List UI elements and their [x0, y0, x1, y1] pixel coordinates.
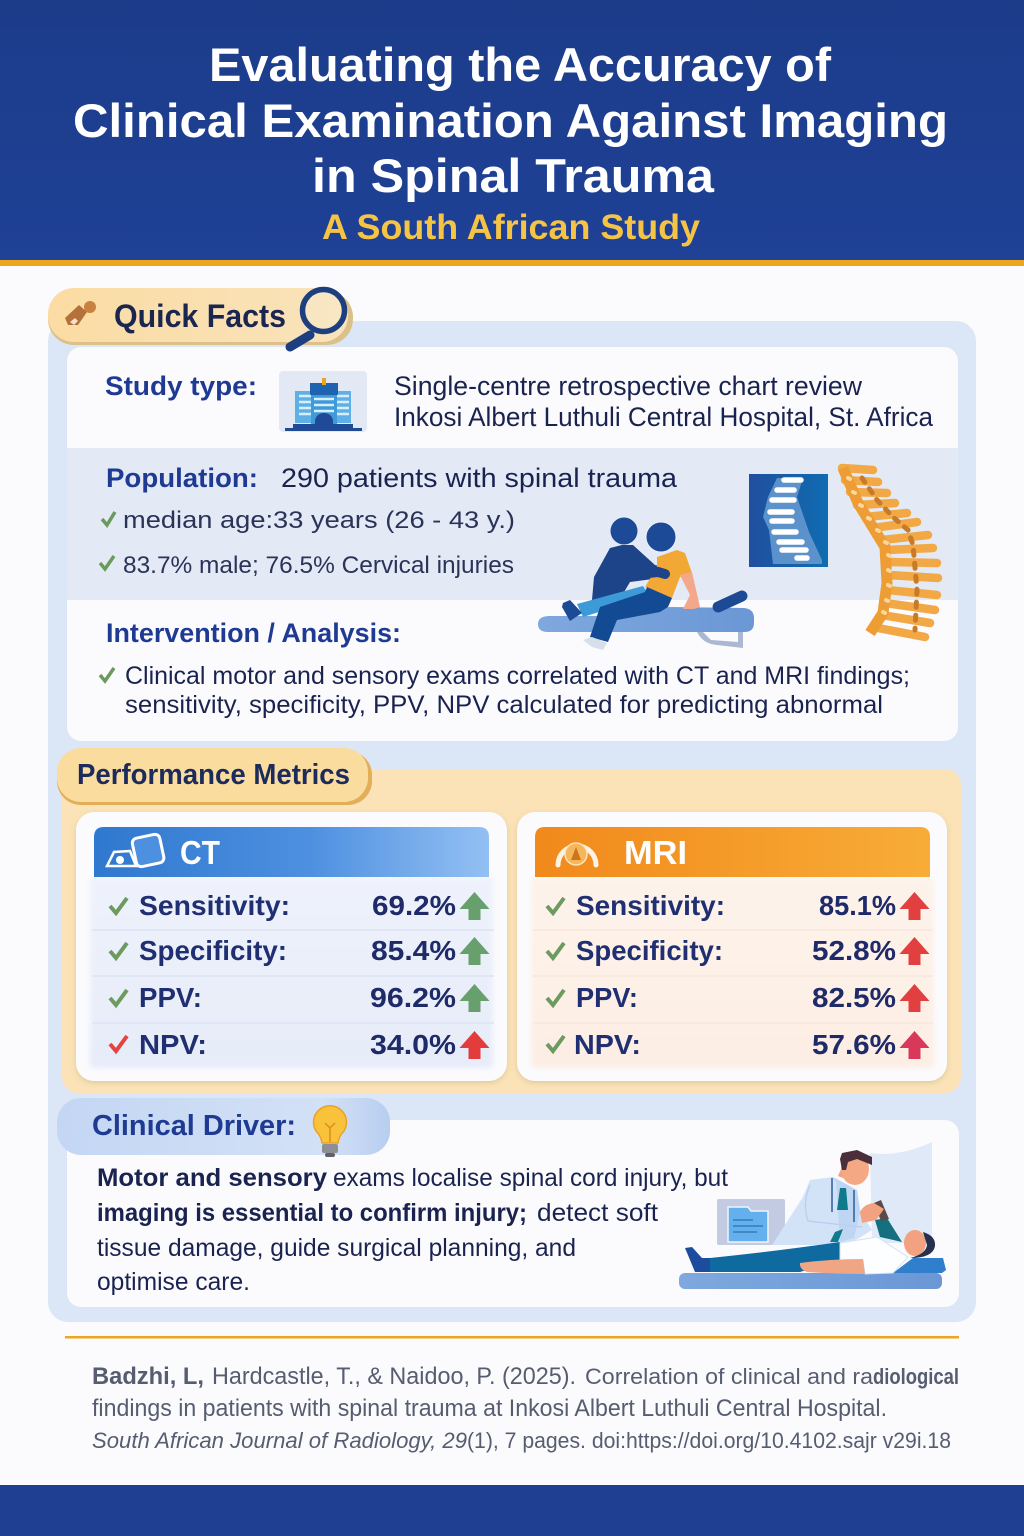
MRI rows: Specificity: — [576, 935, 723, 966]
CT rows: 85.4% — [371, 935, 456, 966]
icon: light bulb — [314, 1106, 346, 1157]
MRI rows: 82.5% — [812, 982, 896, 1013]
MRI rows — [533, 890, 933, 1060]
citation: South African Journal of Radiology, 29 — [92, 1428, 467, 1453]
citation: Badzhi, L, — [92, 1363, 204, 1390]
x-ray image — [749, 474, 828, 567]
quick facts pill heading — [48, 288, 353, 347]
study type row: Inkosi Albert Luthuli Central Hospital, St. Africa — [394, 402, 933, 432]
icon: magnifier — [290, 290, 344, 347]
MRI rows: Sensitivity: — [576, 890, 725, 921]
header banner — [0, 0, 1024, 266]
citation: (1), 7 pages. doi:https://doi.org/10.4102.sajr v29i.18 — [467, 1428, 951, 1453]
illustration: clinician examining patient on table — [538, 518, 754, 650]
clinical driver text: optimise care. — [97, 1268, 250, 1296]
illustration: spine — [842, 468, 938, 637]
clinical driver text — [97, 1164, 728, 1296]
performance metrics pill heading: Performance Metrics — [77, 759, 350, 791]
CT rows: 96.2% — [370, 982, 456, 1013]
population text: 83.7% male; 76.5% Cervical injuries — [123, 552, 514, 579]
citation — [92, 1363, 959, 1453]
illustration: doctor examining patient — [679, 1142, 946, 1289]
intervention section: sensitivity, specificity, PPV, NPV calculated for predicting abnormal — [125, 691, 883, 719]
population text: median age:33 years (26 - 43 y.) — [123, 507, 515, 534]
divider — [65, 1336, 959, 1338]
icon: hospital — [279, 371, 367, 432]
title — [73, 38, 948, 202]
clinical driver pill heading — [57, 1098, 390, 1157]
citation: findings in patients with spinal trauma at Inkosi Albert Luthuli Central Hospital. — [92, 1395, 887, 1422]
subtitle: A South African Study — [322, 208, 701, 247]
panel: clinical driver — [57, 1098, 959, 1307]
CT header: CT — [180, 834, 220, 871]
citation: Hardcastle, T., & Naidoo, P. (2025). — [212, 1363, 576, 1390]
CT rows: Sensitivity: — [139, 890, 290, 921]
clinical driver text: Motor and sensory — [97, 1164, 327, 1192]
clinical driver text: exams localise spinal cord injury, but — [333, 1164, 728, 1192]
clinical driver pill heading: Clinical Driver: — [92, 1110, 296, 1142]
MRI header: MRI — [624, 834, 687, 871]
MRI header — [535, 827, 930, 877]
intervention section — [100, 618, 910, 719]
CT rows — [92, 890, 494, 1060]
intervention section: Intervention / Analysis: — [106, 618, 401, 648]
panel: quick facts — [48, 288, 958, 741]
CT header — [94, 827, 489, 877]
MRI rows: 85.1% — [819, 890, 896, 921]
panel: performance metrics — [57, 748, 961, 1093]
card: MRI — [517, 812, 947, 1081]
icon: MRI scanner — [558, 843, 596, 865]
study type row — [105, 371, 933, 432]
card: CT — [76, 812, 507, 1081]
title: Clinical Examination Against Imaging — [73, 94, 948, 147]
clinical driver text: tissue damage, guide surgical planning, and — [97, 1234, 576, 1262]
CT rows: 34.0% — [370, 1029, 456, 1060]
footer band — [0, 1485, 1024, 1536]
MRI rows: NPV: — [574, 1029, 641, 1060]
population band — [67, 448, 958, 600]
intervention section: Clinical motor and sensory exams correlated with CT and MRI findings; — [125, 662, 910, 690]
title: in Spinal Trauma — [312, 149, 715, 202]
CT rows: PPV: — [139, 982, 202, 1013]
quick facts pill heading: Quick Facts — [114, 298, 286, 334]
title: Evaluating the Accuracy of — [209, 38, 831, 91]
population text: Population: — [106, 463, 258, 493]
MRI rows: PPV: — [576, 982, 638, 1013]
population text: 290 patients with spinal trauma — [281, 463, 678, 493]
study type row: Study type: — [105, 371, 257, 401]
CT rows: Specificity: — [139, 935, 287, 966]
performance metrics pill heading — [57, 748, 372, 805]
population text — [100, 463, 678, 579]
citation: diological — [873, 1364, 959, 1389]
clinical driver text: imaging is essential to confirm injury; — [97, 1199, 527, 1227]
CT rows: 69.2% — [372, 890, 456, 921]
clinical driver text: detect soft — [537, 1199, 658, 1227]
icon: CT scanner — [107, 833, 165, 868]
citation: Correlation of clinical and ra — [585, 1364, 873, 1389]
outer panel: study summary — [48, 321, 976, 1322]
icon: bandage — [65, 301, 96, 325]
MRI rows: 52.8% — [812, 935, 896, 966]
study type row: Single-centre retrospective chart review — [394, 371, 863, 401]
MRI rows: 57.6% — [812, 1029, 896, 1060]
CT rows: NPV: — [139, 1029, 207, 1060]
